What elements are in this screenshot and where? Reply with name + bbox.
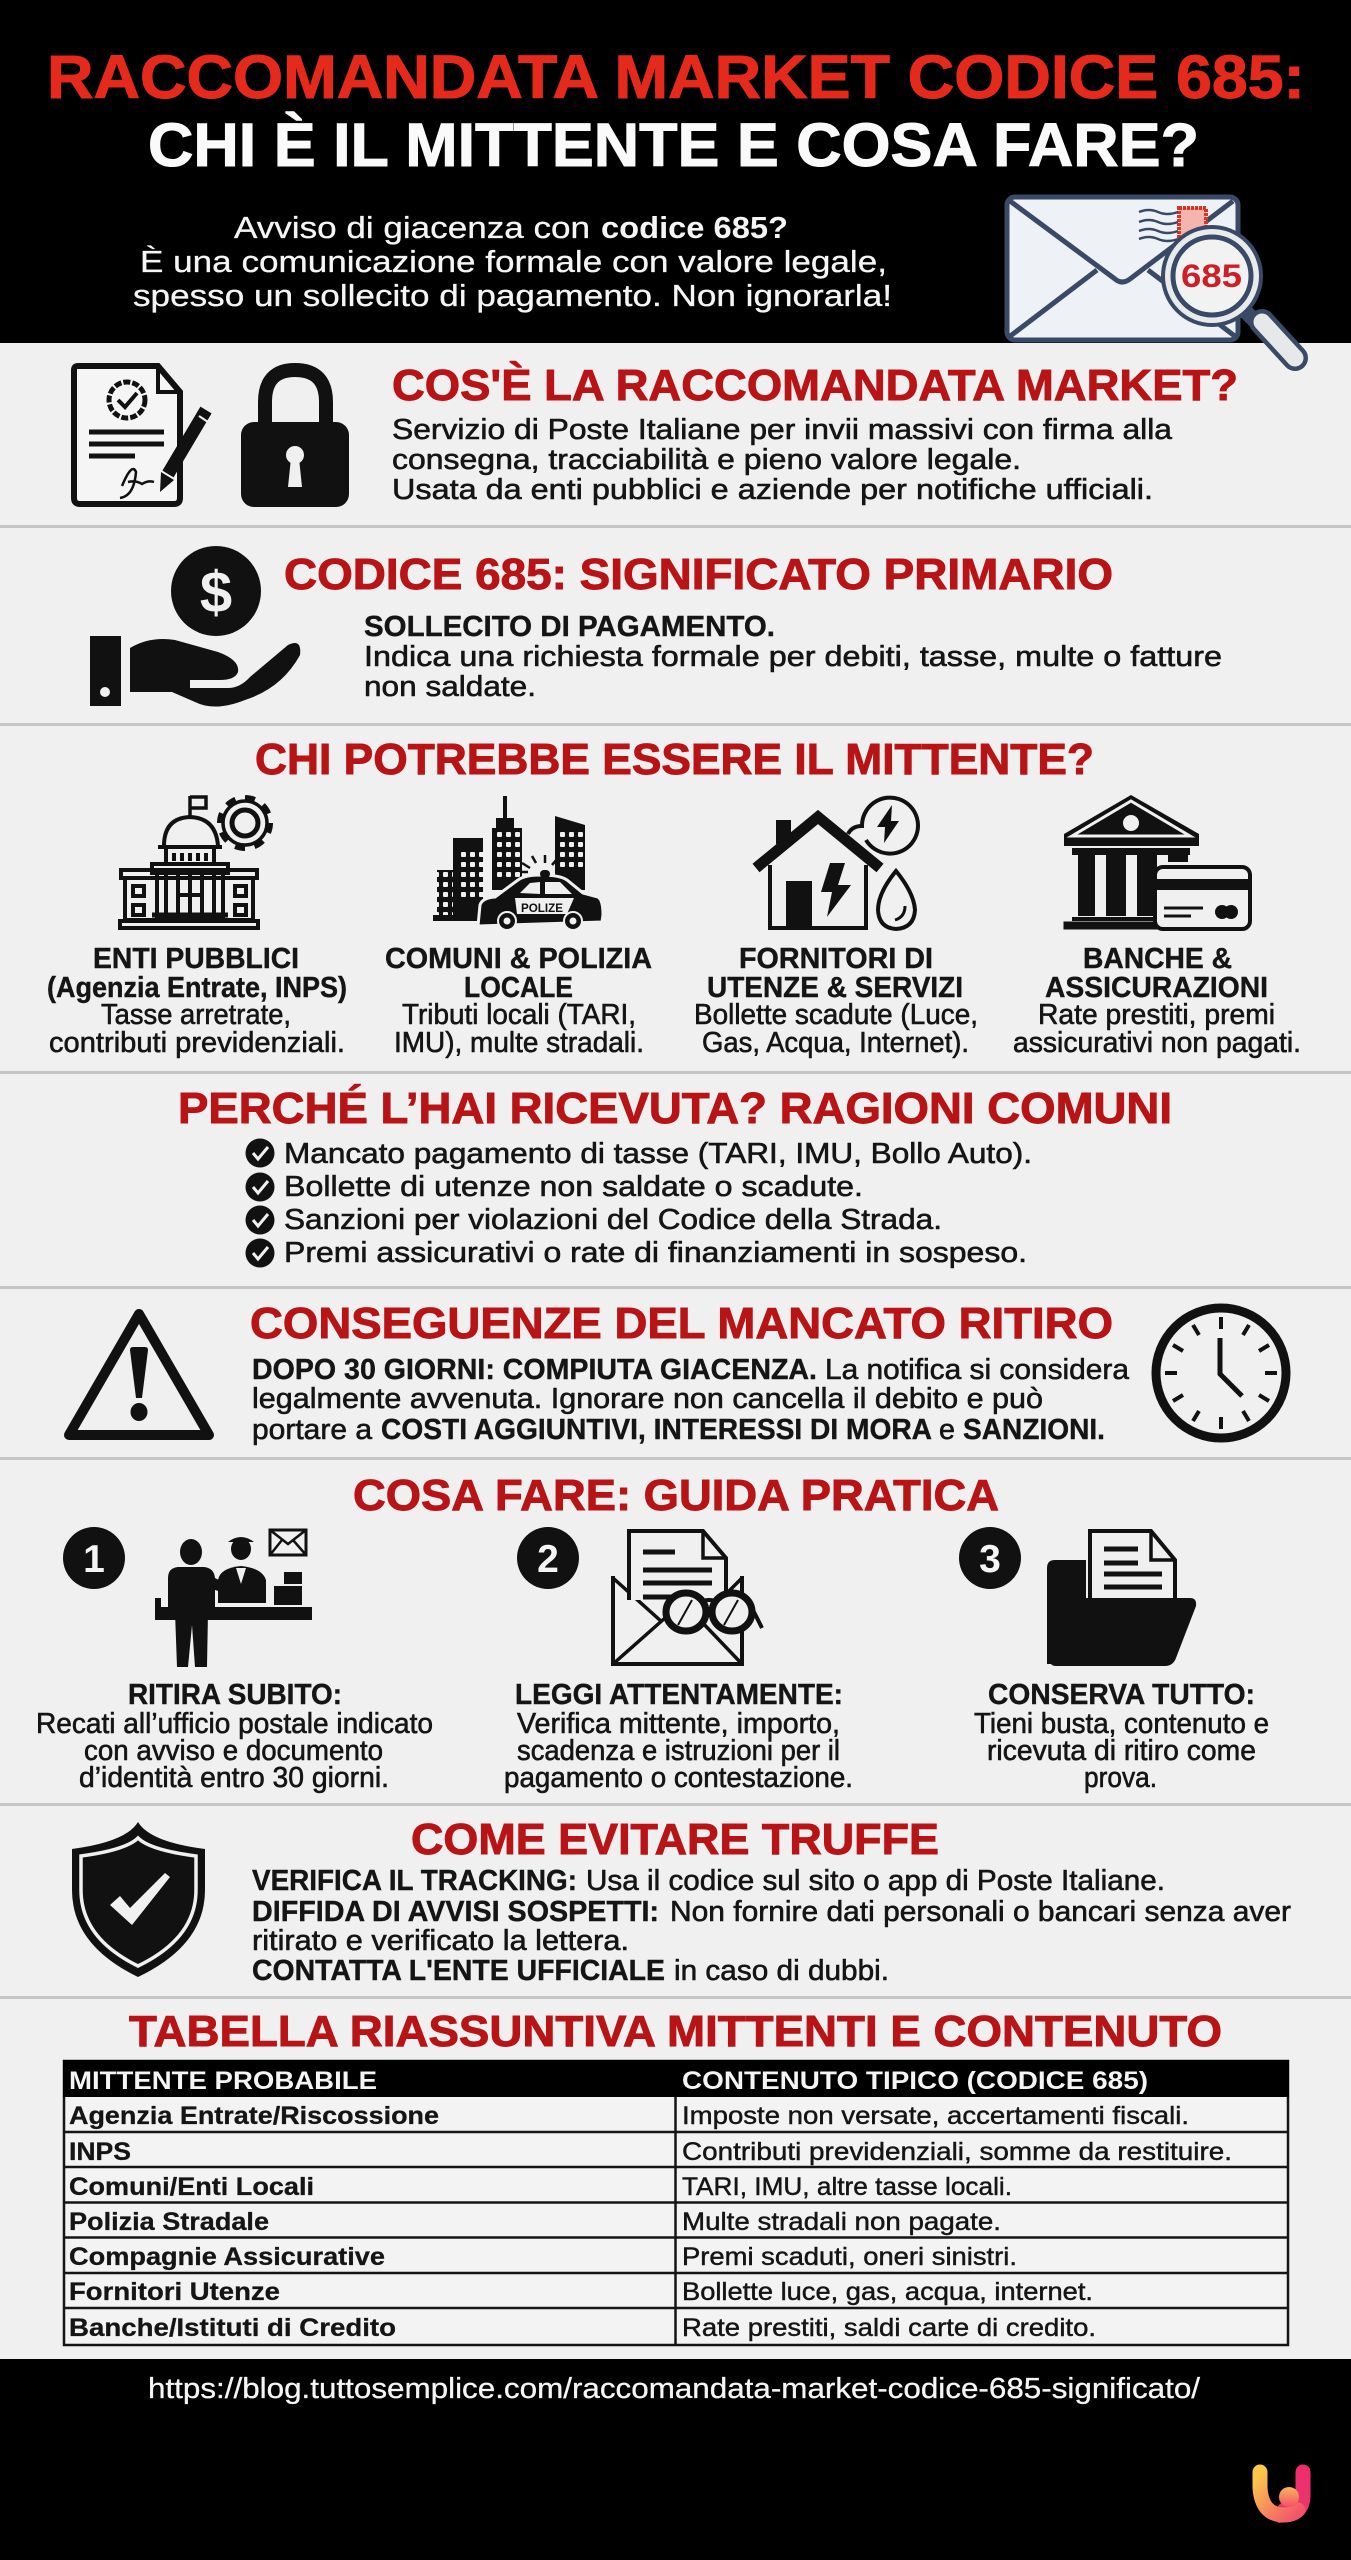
step 2 xyxy=(504,1527,853,1794)
text block: description xyxy=(392,414,1173,506)
title: CHI È IL MITTENTE E COSA FARE? xyxy=(148,111,1199,179)
icon: hand with dollar coin xyxy=(90,546,300,707)
heading: mittente: CHI POTREBBE ESSERE IL MITTENTE? xyxy=(255,735,1094,784)
icon: city and police car xyxy=(433,796,603,930)
heading: tabella: TABELLA RIASSUNTIVA MITTENTI E CONTENUTO xyxy=(129,2007,1222,2056)
table row: compagnie: Compagnie Assicurative xyxy=(69,2243,385,2271)
list item: bollette: Bollette di utenze non saldate o scadute. xyxy=(284,1171,863,1203)
badge: number 2 xyxy=(517,1527,579,1589)
table row: comuni xyxy=(69,2173,1012,2201)
icon: letter and glasses xyxy=(613,1531,762,1664)
panel: codice 685 significato xyxy=(90,546,1222,707)
text block: sollecito di pagamento xyxy=(364,611,1222,703)
table row: polizia: Multe stradali non pagate. xyxy=(682,2208,1001,2236)
icon: hand with dollar coin: $ xyxy=(200,560,232,625)
intro text: È una comunicazione formale con valore legale, xyxy=(140,244,887,279)
text block: truffe: Non fornire dati personali o bancari senza aver xyxy=(670,1896,1291,1928)
badge: number 1 xyxy=(63,1527,125,1589)
intro text xyxy=(133,210,892,313)
text: conserva tutto: prova. xyxy=(1084,1762,1157,1794)
icon: signed document with pen xyxy=(74,366,208,504)
table row: polizia xyxy=(69,2208,1001,2236)
table row: comuni: TARI, IMU, altre tasse locali. xyxy=(682,2173,1012,2201)
text block: truffe xyxy=(252,1865,1291,1987)
text: ritira subito: RITIRA SUBITO: xyxy=(128,1679,342,1711)
panel: chi potrebbe essere il mittente xyxy=(47,735,1301,1059)
heading: guida pratica: COSA FARE: GUIDA PRATICA xyxy=(353,1471,999,1520)
text: enti pubblici xyxy=(47,943,347,1059)
intro text: Avviso di giacenza con xyxy=(234,210,590,245)
table row: fornitori xyxy=(69,2278,1093,2306)
table row: banche xyxy=(69,2314,1096,2342)
text: ritira subito: d’identità entro 30 giorni. xyxy=(79,1762,389,1794)
text: comuni e polizia: COMUNI & POLIZIA xyxy=(385,943,652,975)
badge: number 3 xyxy=(959,1527,1021,1589)
list item: premi: Premi assicurativi o rate di finanziamenti in sospeso. xyxy=(284,1237,1027,1269)
title xyxy=(47,43,1305,179)
text block: conseguenze: DOPO 30 GIORNI: COMPIUTA GIACENZA. xyxy=(252,1354,817,1386)
text: leggi attentamente: LEGGI ATTENTAMENTE: xyxy=(515,1679,843,1711)
text: conserva tutto: CONSERVA TUTTO: xyxy=(988,1679,1255,1711)
table row: agenzia entrate: Imposte non versate, accertamenti fiscali. xyxy=(682,2102,1189,2130)
title: RACCOMANDATA MARKET CODICE 685: xyxy=(47,43,1305,111)
text block: truffe: DIFFIDA DI AVVISI SOSPETTI: xyxy=(252,1896,659,1928)
column: comuni e polizia xyxy=(385,796,652,1059)
text block: sollecito di pagamento: Indica una richiesta formale per debiti, tasse, multe o fatture xyxy=(364,641,1222,673)
text: enti pubblici: ENTI PUBBLICI xyxy=(93,943,299,975)
table row: inps xyxy=(69,2138,1232,2166)
text block: truffe: CONTATTA L'ENTE UFFICIALE xyxy=(252,1955,665,1987)
text: fornitori: Bollette scadute (Luce, xyxy=(694,999,978,1031)
step 1 xyxy=(36,1527,433,1794)
text block: conseguenze: portare a xyxy=(252,1414,373,1446)
panel: perché l'hai ricevuta xyxy=(178,1083,1172,1269)
panel: come evitare truffe xyxy=(72,1815,1291,1987)
table row: inps: INPS xyxy=(69,2138,131,2166)
text block: description: consegna, tracciabilità e pieno valore legale. xyxy=(392,444,1021,476)
text: fornitori: FORNITORI DI xyxy=(739,943,933,975)
text: conserva tutto: Tieni busta, contenuto e xyxy=(974,1708,1269,1740)
text: fornitori: Gas, Acqua, Internet). xyxy=(702,1027,969,1059)
icon: shield with check xyxy=(72,1822,205,1977)
heading: cos'è la raccomandata market: COS'È LA RACCOMANDATA MARKET? xyxy=(392,360,1238,410)
text block: conseguenze: legalmente avvenuta. Ignorare non cancella il debito e può xyxy=(252,1383,1043,1415)
text: enti pubblici: Tasse arretrate, xyxy=(101,999,291,1031)
icon: bank and credit card xyxy=(1064,795,1250,929)
text: leggi attentamente: pagamento o contestazione. xyxy=(504,1762,853,1794)
panel: tabella riassuntiva xyxy=(63,2007,1289,2345)
text block: conseguenze: SANZIONI. xyxy=(963,1414,1105,1446)
table row: agenzia entrate: Agenzia Entrate/Riscossione xyxy=(69,2102,439,2130)
text block: truffe: VERIFICA IL TRACKING: xyxy=(252,1865,577,1897)
table row: compagnie: Premi scaduti, oneri sinistri. xyxy=(682,2243,1017,2271)
icon: government building and gear xyxy=(120,796,270,928)
text: enti pubblici: contributi previdenziali. xyxy=(49,1027,345,1059)
text: comuni e polizia xyxy=(385,943,652,1059)
icon: folder with document xyxy=(1047,1531,1196,1666)
icon: warning triangle xyxy=(69,1314,209,1435)
column: fornitori xyxy=(694,798,978,1059)
table row: banche: Banche/Istituti di Credito xyxy=(69,2314,396,2342)
text block: truffe: Usa il codice sul sito o app di Poste Italiane. xyxy=(586,1865,1165,1897)
column: banche xyxy=(1013,795,1301,1059)
text: leggi attentamente: scadenza e istruzioni per il xyxy=(517,1735,840,1767)
text: banche xyxy=(1013,943,1301,1059)
text: ritira subito: con avviso e documento xyxy=(84,1735,383,1767)
badge: number 3: 3 xyxy=(979,1538,1001,1581)
text: banche: assicurativi non pagati. xyxy=(1013,1027,1301,1059)
text block: conseguenze: e xyxy=(939,1414,955,1446)
text block: description: Servizio di Poste Italiane per invii massivi con firma alla xyxy=(392,414,1173,446)
text: leggi attentamente xyxy=(504,1679,853,1794)
step 3 xyxy=(959,1527,1269,1794)
table header: MITTENTE PROBABILE xyxy=(69,2067,377,2095)
text: fornitori xyxy=(694,943,978,1059)
panel: cos'è la raccomandata market xyxy=(74,360,1238,507)
text: leggi attentamente: Verifica mittente, importo, xyxy=(517,1708,840,1740)
icon: envelope with magnifier xyxy=(1007,197,1295,358)
table row: fornitori: Fornitori Utenze xyxy=(69,2278,280,2306)
heading: codice 685: CODICE 685: SIGNIFICATO PRIMARIO xyxy=(284,550,1113,599)
column: enti pubblici xyxy=(47,796,347,1059)
icon: logo xyxy=(1260,2472,1303,2515)
text: comuni e polizia: LOCALE xyxy=(464,972,573,1004)
icon: clock xyxy=(1156,1308,1286,1438)
text: banche: ASSICURAZIONI xyxy=(1045,972,1268,1004)
text: conserva tutto: ricevuta di ritiro come xyxy=(987,1735,1256,1767)
table row: agenzia entrate xyxy=(69,2102,1189,2130)
badge: number 2: 2 xyxy=(537,1538,559,1581)
list item: tasse: Mancato pagamento di tasse (TARI, IMU, Bollo Auto). xyxy=(284,1138,1032,1170)
text block: truffe: in caso di dubbi. xyxy=(674,1955,889,1987)
intro text: codice 685? xyxy=(601,210,788,245)
text: comuni e polizia: Tributi locali (TARI, xyxy=(402,999,636,1031)
footer url: https://blog.tuttosemplice.com/raccomandata-market-codice-685-significato/ xyxy=(148,2373,1200,2405)
text: banche: Rate prestiti, premi xyxy=(1038,999,1275,1031)
panel: conseguenze xyxy=(69,1299,1286,1446)
text block: conseguenze: La notifica si considera xyxy=(825,1354,1130,1386)
text block: sollecito di pagamento: non saldate. xyxy=(364,671,536,703)
table row: comuni: Comuni/Enti Locali xyxy=(69,2173,314,2201)
text block: sollecito di pagamento: SOLLECITO DI PAGAMENTO. xyxy=(364,611,775,643)
table row: fornitori: Bollette luce, gas, acqua, internet. xyxy=(682,2278,1093,2306)
icon: city and police car: POLIZE xyxy=(521,901,563,915)
intro text: spesso un sollecito di pagamento. Non ignorarla! xyxy=(133,278,892,313)
icon: envelope with magnifier: 685 xyxy=(1181,258,1242,294)
text: ritira subito: Recati all’ufficio postale indicato xyxy=(36,1708,433,1740)
table row: banche: Rate prestiti, saldi carte di credito. xyxy=(682,2314,1096,2342)
text block: truffe: ritirato e verificato la lettera. xyxy=(252,1925,629,1957)
panel: cosa fare guida pratica xyxy=(36,1471,1269,1794)
text: comuni e polizia: IMU), multe stradali. xyxy=(394,1027,644,1059)
badge: number 1: 1 xyxy=(83,1538,105,1581)
text: banche: BANCHE & xyxy=(1083,943,1232,975)
text: conserva tutto xyxy=(974,1679,1269,1794)
heading: conseguenze: CONSEGUENZE DEL MANCATO RITIRO xyxy=(250,1299,1113,1348)
list item: sanzioni: Sanzioni per violazioni del Codice della Strada. xyxy=(284,1204,942,1236)
text block: conseguenze: COSTI AGGIUNTIVI, INTERESSI DI MORA xyxy=(381,1414,932,1446)
table header xyxy=(69,2067,1148,2095)
text block: description: Usata da enti pubblici e aziende per notifiche ufficiali. xyxy=(392,474,1153,506)
table row: inps: Contributi previdenziali, somme da restituire. xyxy=(682,2138,1232,2166)
table header: CONTENUTO TIPICO (CODICE 685) xyxy=(682,2067,1148,2095)
heading: ragioni comuni: PERCHÉ L’HAI RICEVUTA? RAGIONI COMUNI xyxy=(178,1083,1172,1133)
icon: post office counter xyxy=(155,1530,312,1667)
heading: truffe: COME EVITARE TRUFFE xyxy=(411,1815,939,1864)
table row: polizia: Polizia Stradale xyxy=(69,2208,269,2236)
table row: compagnie xyxy=(69,2243,1017,2271)
icon: padlock xyxy=(241,370,349,507)
text block: conseguenze xyxy=(252,1354,1130,1446)
table xyxy=(63,2060,1289,2345)
text: enti pubblici: (Agenzia Entrate, INPS) xyxy=(47,972,347,1004)
text: fornitori: UTENZE & SERVIZI xyxy=(707,972,963,1004)
icon: house with energy and water xyxy=(756,798,918,929)
text: ritira subito xyxy=(36,1679,433,1794)
